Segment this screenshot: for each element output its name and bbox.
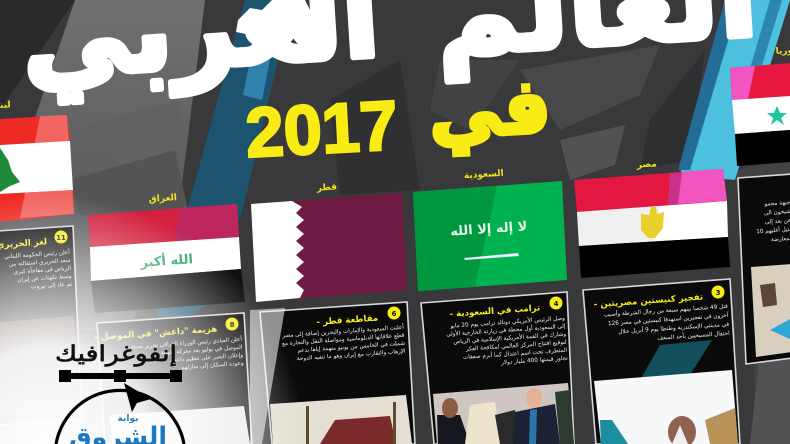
panel: Syria: جبهة محمو bbox=[763, 200, 790, 208]
country labels bbox=[0, 45, 790, 205]
panel: Saudi Arabia: 4 bbox=[554, 300, 559, 308]
panel: Saudi Arabia: تجاوز قيمتها 400 مليار دولار bbox=[500, 356, 568, 366]
panel: Lebanon: ثم عاد إلى بيروت bbox=[31, 282, 73, 291]
panel: Qatar: قطع علاقاتها الدبلوماسية ومواصلة النقل والتجارة مع bbox=[282, 333, 405, 347]
panel: Lebanon: أعلن رئيس الحكومة اللبناني bbox=[4, 248, 71, 260]
blue band bbox=[150, 0, 292, 340]
panel: Lebanon: 11 bbox=[56, 234, 66, 242]
logo brand text: بوابة bbox=[118, 414, 138, 424]
panel: Egypt: في مدينتي الإسكندرية وطنطا يوم 9 أبريل خلال bbox=[618, 320, 730, 336]
subtitle: in 2017: في bbox=[426, 61, 553, 157]
panel: Iraq: - هزيمة "داعش" في الموصل bbox=[94, 324, 218, 343]
panel: Lebanon: سعد الحريري استقالته من bbox=[9, 258, 71, 268]
flag: Qatar bbox=[251, 193, 407, 302]
flag: Egypt bbox=[574, 169, 730, 278]
panel: Qatar bbox=[260, 302, 415, 444]
country labels: مصر bbox=[636, 159, 657, 171]
logo: Al Shorouk infographic bbox=[55, 342, 184, 444]
panel: Iraq bbox=[94, 313, 252, 444]
country labels: قطر bbox=[315, 182, 337, 194]
flag: Saudi Arabia bbox=[413, 181, 567, 291]
country labels: العراق bbox=[148, 193, 177, 205]
panel: Iraq: الموصل في يوليو بعد معركة طويلة bbox=[160, 344, 243, 356]
panel: Qatar: شملت في الخامس من يونيو متهمة إياها بدعم bbox=[297, 341, 405, 354]
cyan band bbox=[680, 0, 790, 180]
panel: Lebanon: وسط تكهنات عن إيران bbox=[17, 273, 72, 283]
panel: Saudi Arabia: إلى السعودية أول محطة في زيارته الخارجية الأولى bbox=[446, 322, 566, 338]
photo: Lebanon bbox=[0, 316, 80, 416]
panel: Egypt: 126 آخرون في تفجيرين استهدفا كنيستين في مصر bbox=[608, 311, 729, 327]
panel: Lebanon bbox=[0, 226, 82, 425]
flag: Saudi Arabia: لا إله إلا الله bbox=[450, 219, 528, 240]
panel: Egypt: 3 bbox=[716, 289, 721, 297]
panel: Iraq: وعودة السكان إلى منازلهم bbox=[181, 360, 244, 371]
logo heading: إنفوغرافيك bbox=[55, 342, 177, 367]
flag: Iraq bbox=[88, 204, 245, 313]
panel: Saudi Arabia: وشارك في القمة الأمريكية الإسلامية في الرياض bbox=[453, 330, 567, 346]
panel: Syria bbox=[738, 174, 790, 364]
country labels: السعودية bbox=[464, 169, 504, 181]
photo: Syria bbox=[751, 264, 790, 357]
panel: Saudi Arabia: وصل الرئيس الأمريكي دونالد ترامب يوم 20 مايو bbox=[449, 314, 565, 330]
panel: Saudi Arabia bbox=[421, 292, 574, 444]
flag: Lebanon bbox=[0, 115, 74, 222]
photo: Iraq bbox=[110, 406, 250, 444]
panel: Qatar: أعلنت السعودية والإمارات والبحرين إضافة إلى مصر bbox=[281, 323, 405, 339]
icon: Arab world map bbox=[236, 0, 334, 50]
panel: Iraq: 8 bbox=[230, 321, 235, 329]
panel: Saudi Arabia: المتطرف تحت اسم اعتدال كما أبرم صفقات bbox=[463, 346, 568, 361]
panel: Qatar: 6 bbox=[392, 310, 397, 318]
panel: Iraq: وإعلان النصر على تنظيم داعش bbox=[169, 353, 244, 364]
flag: Iraq: الله أكبر bbox=[139, 250, 193, 271]
subtitle: in 2017: 2017 bbox=[244, 86, 400, 172]
subtitle: in 2017 bbox=[244, 61, 553, 172]
photo: Saudi summit bbox=[433, 383, 574, 444]
panel: Egypt: قتل 49 شخصا بينهم سبعة من رجال الشرطة وأصيب bbox=[603, 302, 728, 318]
flag: Syria bbox=[730, 63, 790, 166]
panel: Egypt: - تفجير كنيستين مصريتين bbox=[593, 293, 703, 310]
photo: Egypt bbox=[594, 370, 738, 444]
icon: vector pen tool bbox=[56, 370, 184, 444]
panel: Saudi Arabia: - ترامب في السعودية bbox=[449, 303, 541, 320]
panel: Qatar: - مقاطعة قطر bbox=[316, 314, 379, 328]
title: Arab world bbox=[18, 0, 761, 106]
panel: Egypt: احتفال المسيحيين بأحد السعف bbox=[657, 329, 730, 342]
panel: Saudi Arabia: لتوقيع افتتاح المركز العالمي لمكافحة الفكر bbox=[465, 339, 567, 353]
panel: Iraq: أعلن العبادي رئيس الوزراء العراقي تحرير مدينة bbox=[130, 335, 243, 351]
panel: Qatar: الإرهاب والتقارب مع إيران وهو ما تنفيه الدوحة bbox=[297, 349, 406, 362]
panel: Egypt bbox=[583, 279, 740, 444]
panel: Lebanon: الرياض في مفاجأة كبرى bbox=[13, 264, 72, 276]
photo: Qatar palace bbox=[270, 395, 412, 444]
